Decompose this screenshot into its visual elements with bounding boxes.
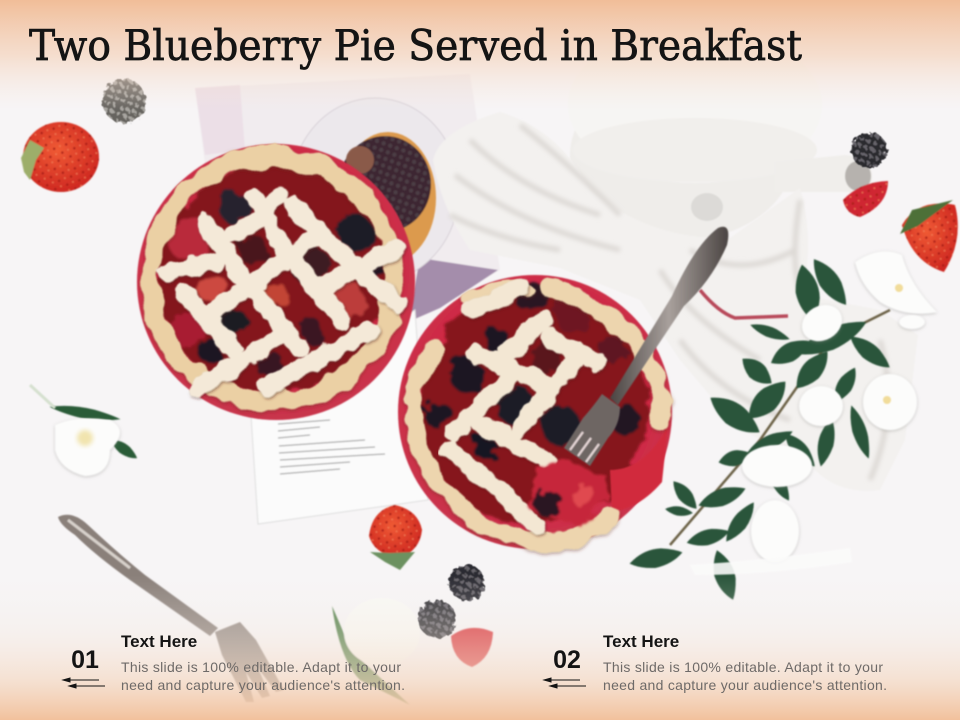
item 01 [63,632,405,693]
blackberry right [851,132,887,168]
left jasmine flower [30,385,140,476]
flower stamens [883,284,903,404]
strawberry bottom centre [369,505,422,570]
item 02 body: This slide is 100% editable. Adapt it to your [603,659,883,675]
fork bottom left [58,515,284,702]
blackberry lower [418,600,456,638]
item 02 arrows [544,678,586,688]
pie 2 plate [398,275,672,549]
blackberry bottom [449,565,485,601]
raspberry bottom [451,628,493,667]
strawberry top left [21,122,99,192]
item 01 arrows [63,678,105,688]
jasmine branch with leaves [628,253,895,603]
title: Two Blueberry Pie Served in Breakfast [29,21,802,70]
recipe sheet and book page [195,74,500,524]
pie 1: left [137,144,415,420]
small strawberry right [843,181,888,217]
pie 2 filling [417,282,649,524]
top peach gradient [0,0,960,110]
towel [433,112,918,491]
blackberry top [102,79,146,123]
teapot [568,27,872,240]
pie 1 lattice [165,195,398,388]
item 01 body: This slide is 100% editable. Adapt it to your [121,659,401,675]
pie 2 crust ring [412,288,662,542]
pie 2: right [398,275,672,549]
item 02 heading: Text Here [603,632,679,651]
item 01 number: 01 [71,646,99,674]
pie 1 crust ring [150,157,394,401]
item 02 [544,632,887,693]
item 02 body: need and capture your audience's attention. [603,677,887,693]
pie 2 lattice [450,287,597,527]
strawberry right edge [900,200,958,272]
item 02 number: 02 [553,646,581,674]
pie 2 bitten slice [530,463,607,530]
pie 2 glaze edge [610,425,668,512]
jasmine flowers [742,251,937,562]
pie 1 filling [156,162,388,394]
towel edge bottom [690,548,852,575]
blueberry tart in recipe photo [339,132,436,264]
flower bottom centre [332,598,420,705]
fork on pie [564,227,728,466]
towel red stripe [700,290,788,318]
pie 1 plate [137,144,415,420]
recipe text lines [278,420,385,474]
item 01 body: need and capture your audience's attention. [121,677,405,693]
bottom peach gradient [0,575,960,720]
item 01 heading: Text Here [121,632,197,651]
